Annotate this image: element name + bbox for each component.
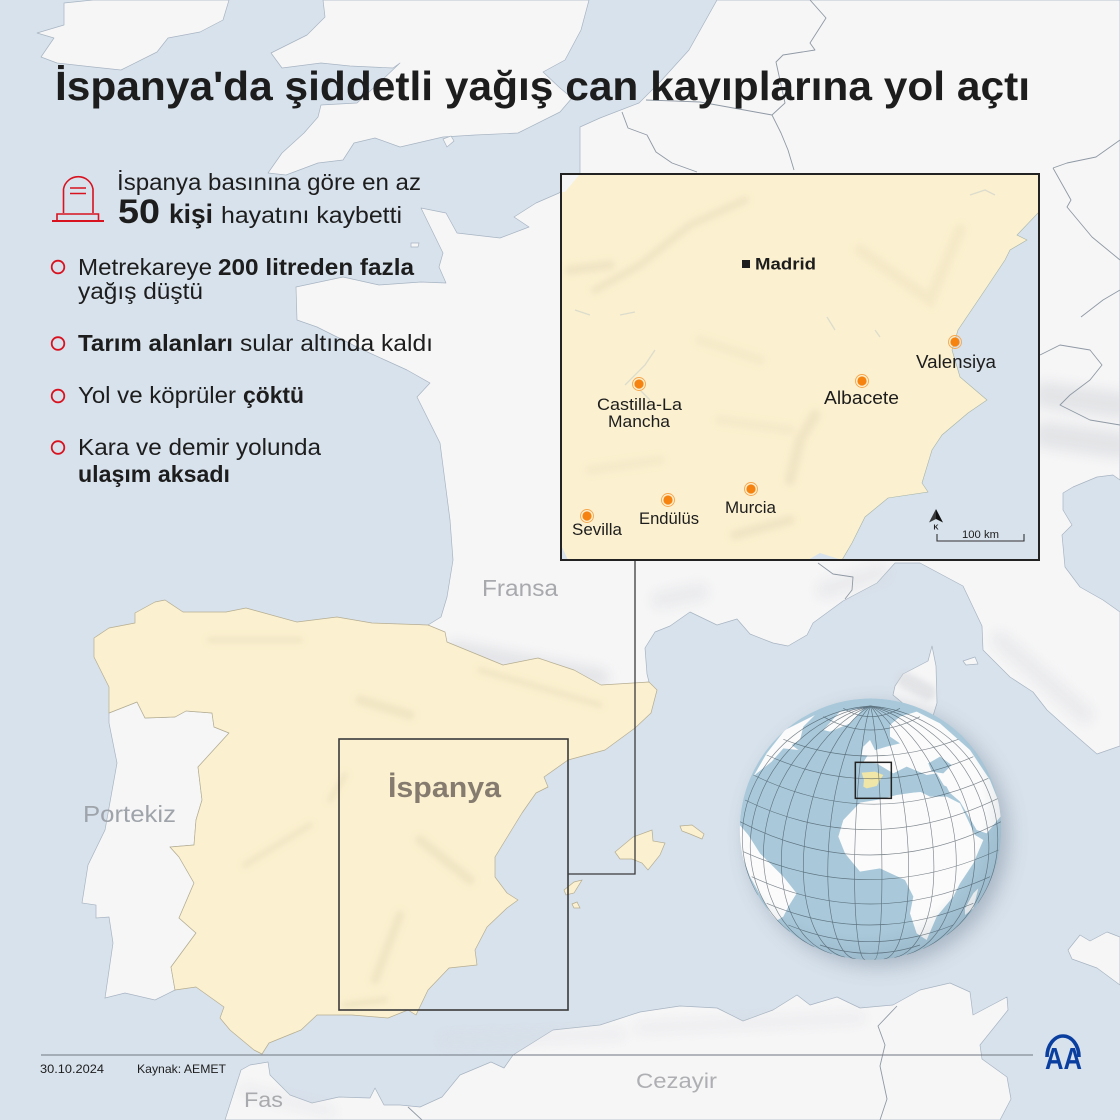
bullet: roads and bridges: Yol ve köprüler	[78, 382, 236, 408]
date: 30.10.2024	[40, 1062, 104, 1076]
map: Spain	[94, 600, 657, 1054]
location: Endülüs	[639, 494, 699, 528]
source: Kaynak: AEMET	[137, 1062, 227, 1076]
bullet: farmland	[52, 330, 433, 356]
logo: AA: AA	[1045, 1041, 1082, 1076]
land: continental Europe	[296, 0, 1120, 754]
island: Mallorca	[615, 830, 665, 870]
island: Ibiza	[564, 880, 582, 895]
inset frame	[561, 174, 1039, 560]
bullet: rainfall	[52, 254, 414, 304]
bullet: rainfall: Metrekareye	[78, 254, 212, 280]
bullet: roads and bridges: çöktü	[243, 382, 304, 408]
land: Corsica	[893, 646, 937, 716]
island: Formentera	[572, 902, 580, 908]
inset land	[561, 174, 1039, 560]
bullet: transport	[52, 434, 321, 487]
footer	[40, 1055, 1033, 1076]
scale bar	[937, 529, 1024, 541]
inset corner: Atlantic	[562, 548, 568, 559]
north arrow	[929, 509, 943, 532]
locator rectangle	[339, 739, 568, 1010]
scale bar: 100 km	[962, 529, 999, 541]
country label: Fransa: Fransa	[482, 575, 558, 601]
globe locator	[738, 698, 1003, 960]
globe shadow	[748, 706, 1008, 966]
location: Albacete: Albacete	[824, 388, 899, 408]
headline fact: kişi	[169, 199, 213, 229]
bullet: farmland: Tarım alanları	[78, 330, 233, 356]
footer rule	[41, 1054, 1033, 1056]
icon: tombstone	[52, 177, 104, 221]
inset sea	[842, 212, 1039, 560]
globe graticule	[740, 706, 1001, 960]
inset bottom sea	[810, 553, 838, 559]
globe land: North America	[753, 715, 815, 777]
location: Castilla-La Mancha	[597, 378, 683, 431]
land: Great Britain	[268, 0, 589, 175]
city marker: Madrid: Madrid	[755, 254, 816, 274]
country label: Portekiz: Portekiz	[83, 801, 176, 827]
location: Sevilla	[572, 510, 623, 539]
headline fact	[117, 169, 421, 231]
relief shading on land	[245, 395, 1118, 1112]
globe land: South America	[738, 823, 797, 922]
north arrow: K	[934, 524, 939, 532]
bullet: farmland: sular altında kaldı	[240, 330, 433, 356]
bullet: rainfall: 200 litreden fazla	[218, 254, 414, 280]
bullet: rainfall: yağış düştü	[78, 278, 203, 304]
globe sea: Black Sea	[928, 757, 952, 773]
location: Valensiya: Valensiya	[916, 352, 997, 372]
bullet: transport: Kara ve demir yolunda	[78, 434, 321, 460]
country label: İspanya: İspanya	[388, 772, 502, 804]
country label: Fas: Fas	[244, 1089, 283, 1112]
globe land: Britain	[862, 740, 875, 756]
location: Castilla-La Mancha: Mancha	[608, 412, 671, 431]
headline fact: İspanya basınına göre en az	[117, 169, 421, 195]
globe land: Madagascar	[965, 888, 978, 915]
title: İspanya'da şiddetli yağış can kayıplarına yol açtı	[55, 63, 1030, 109]
locator frame and connector to inset	[339, 560, 635, 1010]
location: Castilla-La Mancha: Castilla-La	[597, 395, 683, 414]
location: Murcia: Murcia	[725, 498, 777, 517]
map: Portugal	[82, 702, 229, 1000]
land: North Africa	[225, 983, 1011, 1120]
globe shading	[769, 778, 1001, 960]
bullet: transport: ulaşım aksadı	[78, 461, 230, 487]
islands: small	[411, 136, 454, 247]
headline fact: hayatını kaybetti	[221, 202, 402, 228]
globe land: Eurasia	[863, 712, 1003, 833]
globe sea: Mediterranean	[914, 785, 950, 792]
location: Sevilla: Sevilla	[572, 520, 623, 539]
inset relief	[568, 199, 818, 538]
location: Albacete	[824, 374, 899, 408]
globe land: Iberia	[862, 772, 883, 788]
globe locator box	[855, 762, 891, 798]
connector line	[568, 560, 635, 874]
inset corner: France	[562, 175, 579, 192]
inset reservoirs and rivers	[575, 190, 995, 400]
country borders	[408, 0, 1120, 1120]
globe ocean	[740, 698, 1001, 960]
land: Elba	[963, 657, 978, 665]
globe land: Greenland	[823, 708, 863, 732]
location: Valensiya	[916, 336, 997, 372]
island: Menorca	[680, 825, 704, 839]
panel: key facts	[52, 169, 433, 487]
country label: Cezayir: Cezayir	[636, 1070, 717, 1093]
location: Murcia	[725, 482, 777, 517]
headline fact: 50	[118, 193, 160, 231]
globe land: Africa	[838, 792, 983, 940]
land: Ireland	[37, 0, 229, 70]
relief on Spain	[210, 640, 600, 1005]
bullet: roads and bridges	[52, 382, 304, 408]
map: Balearic Islands	[564, 825, 704, 908]
location: Endülüs: Endülüs	[639, 509, 699, 528]
land: Sicily	[1068, 932, 1120, 985]
panel: inset map	[561, 174, 1039, 560]
